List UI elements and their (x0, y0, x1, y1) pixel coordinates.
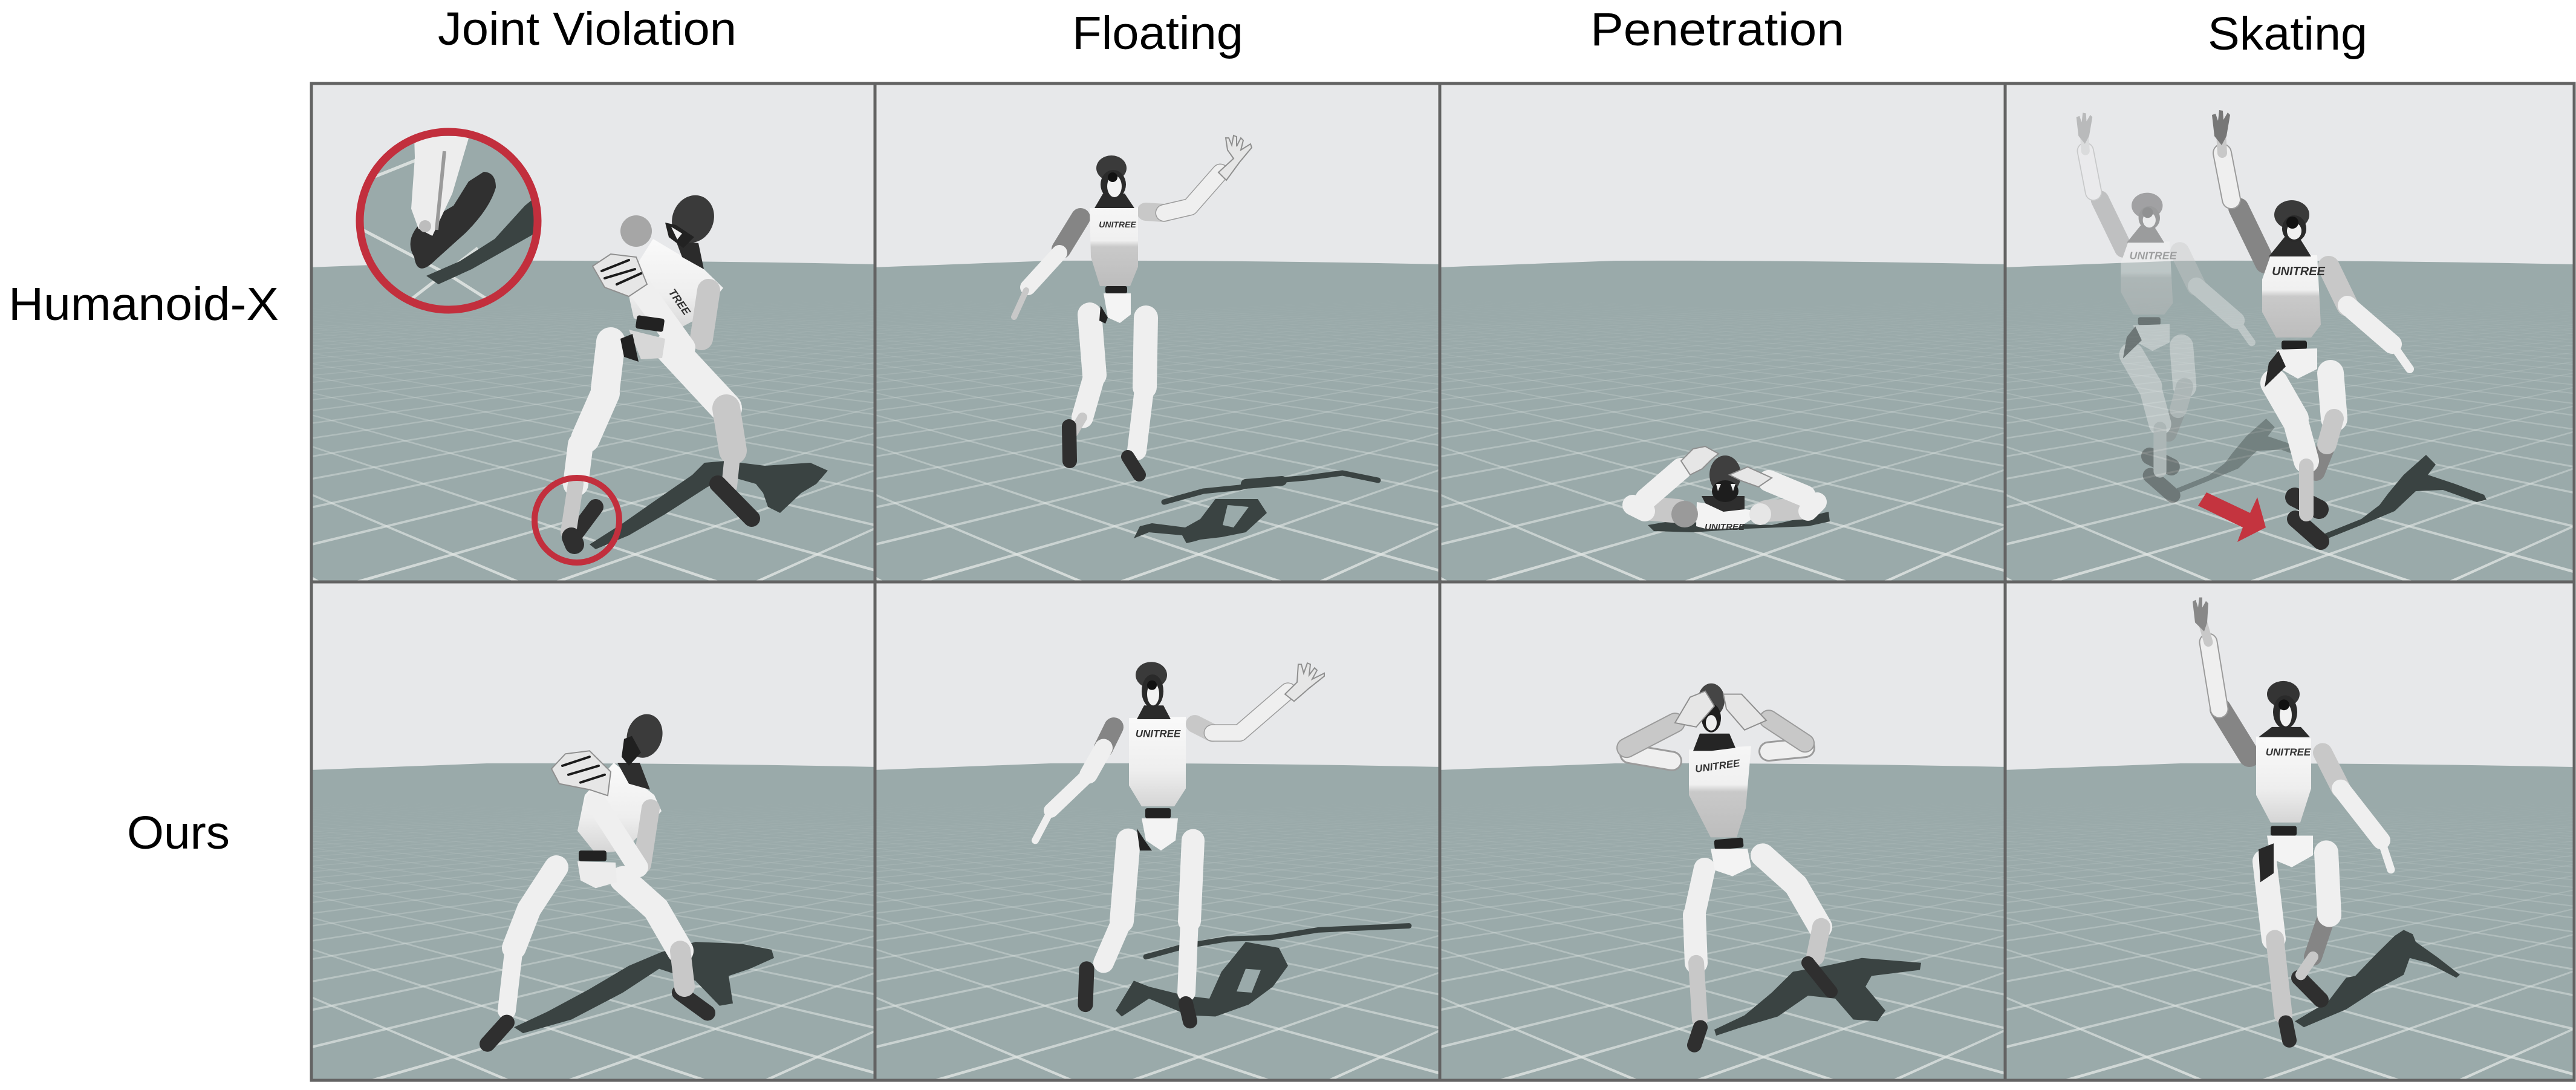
robot 3 (1633, 446, 1817, 532)
shadow: robot 2 (1134, 473, 1378, 543)
shadow: robot 7 (1714, 958, 1921, 1036)
panel: Humanoid-X skating (0, 80, 2576, 631)
robot 3: UNITREE (1705, 522, 1745, 532)
heading: Penetration: Penetration (1590, 4, 1844, 56)
robot 2: UNITREE (1099, 220, 1136, 229)
shadow: robot 3 (1648, 512, 1830, 532)
panel: Humanoid-X joint violation (313, 85, 873, 581)
panel: Humanoid-X floating (0, 80, 2576, 631)
ghost robot: previous frame (2077, 113, 2320, 495)
robot 4 (2212, 110, 2410, 541)
shadow: robot 1 (590, 461, 828, 549)
panel: Humanoid-X penetration (0, 80, 2576, 631)
shadow: robot 8 (2295, 930, 2460, 1027)
robot 6 (1035, 662, 1324, 1021)
callout: zoomed foot inset (357, 130, 544, 312)
robot 6: UNITREE (1136, 728, 1181, 740)
row label: Ours: Ours (127, 807, 230, 859)
heading: Joint Violation: Joint Violation (438, 3, 737, 55)
panel: Ours joint violation (0, 583, 2576, 1090)
callout: small red circle on foot (535, 478, 619, 563)
panel: Ours skating (0, 583, 2576, 1090)
robot 8 (2193, 598, 2391, 1040)
robot 1 (568, 189, 752, 544)
panel: Ours floating (0, 583, 2576, 1090)
robot 7: UNITREE (1694, 757, 1741, 775)
shadow: robot 5 (514, 942, 774, 1033)
robot 5 (487, 710, 707, 1044)
row label: Humanoid-X: Humanoid-X (8, 278, 279, 330)
robot 1: TREE (666, 287, 693, 318)
robot 8: UNITREE (2266, 746, 2311, 758)
heading: Floating: Floating (1072, 7, 1243, 59)
shadow: robot 4 (2325, 455, 2487, 538)
robot 7 (1627, 684, 1831, 1045)
robot 2 (1014, 135, 1252, 475)
heading: Skating: Skating (2208, 8, 2367, 60)
arrow: foot sliding direction (2198, 492, 2266, 542)
panel: Ours penetration (0, 583, 2576, 1090)
shadow: robot 6 (1116, 926, 1409, 1017)
